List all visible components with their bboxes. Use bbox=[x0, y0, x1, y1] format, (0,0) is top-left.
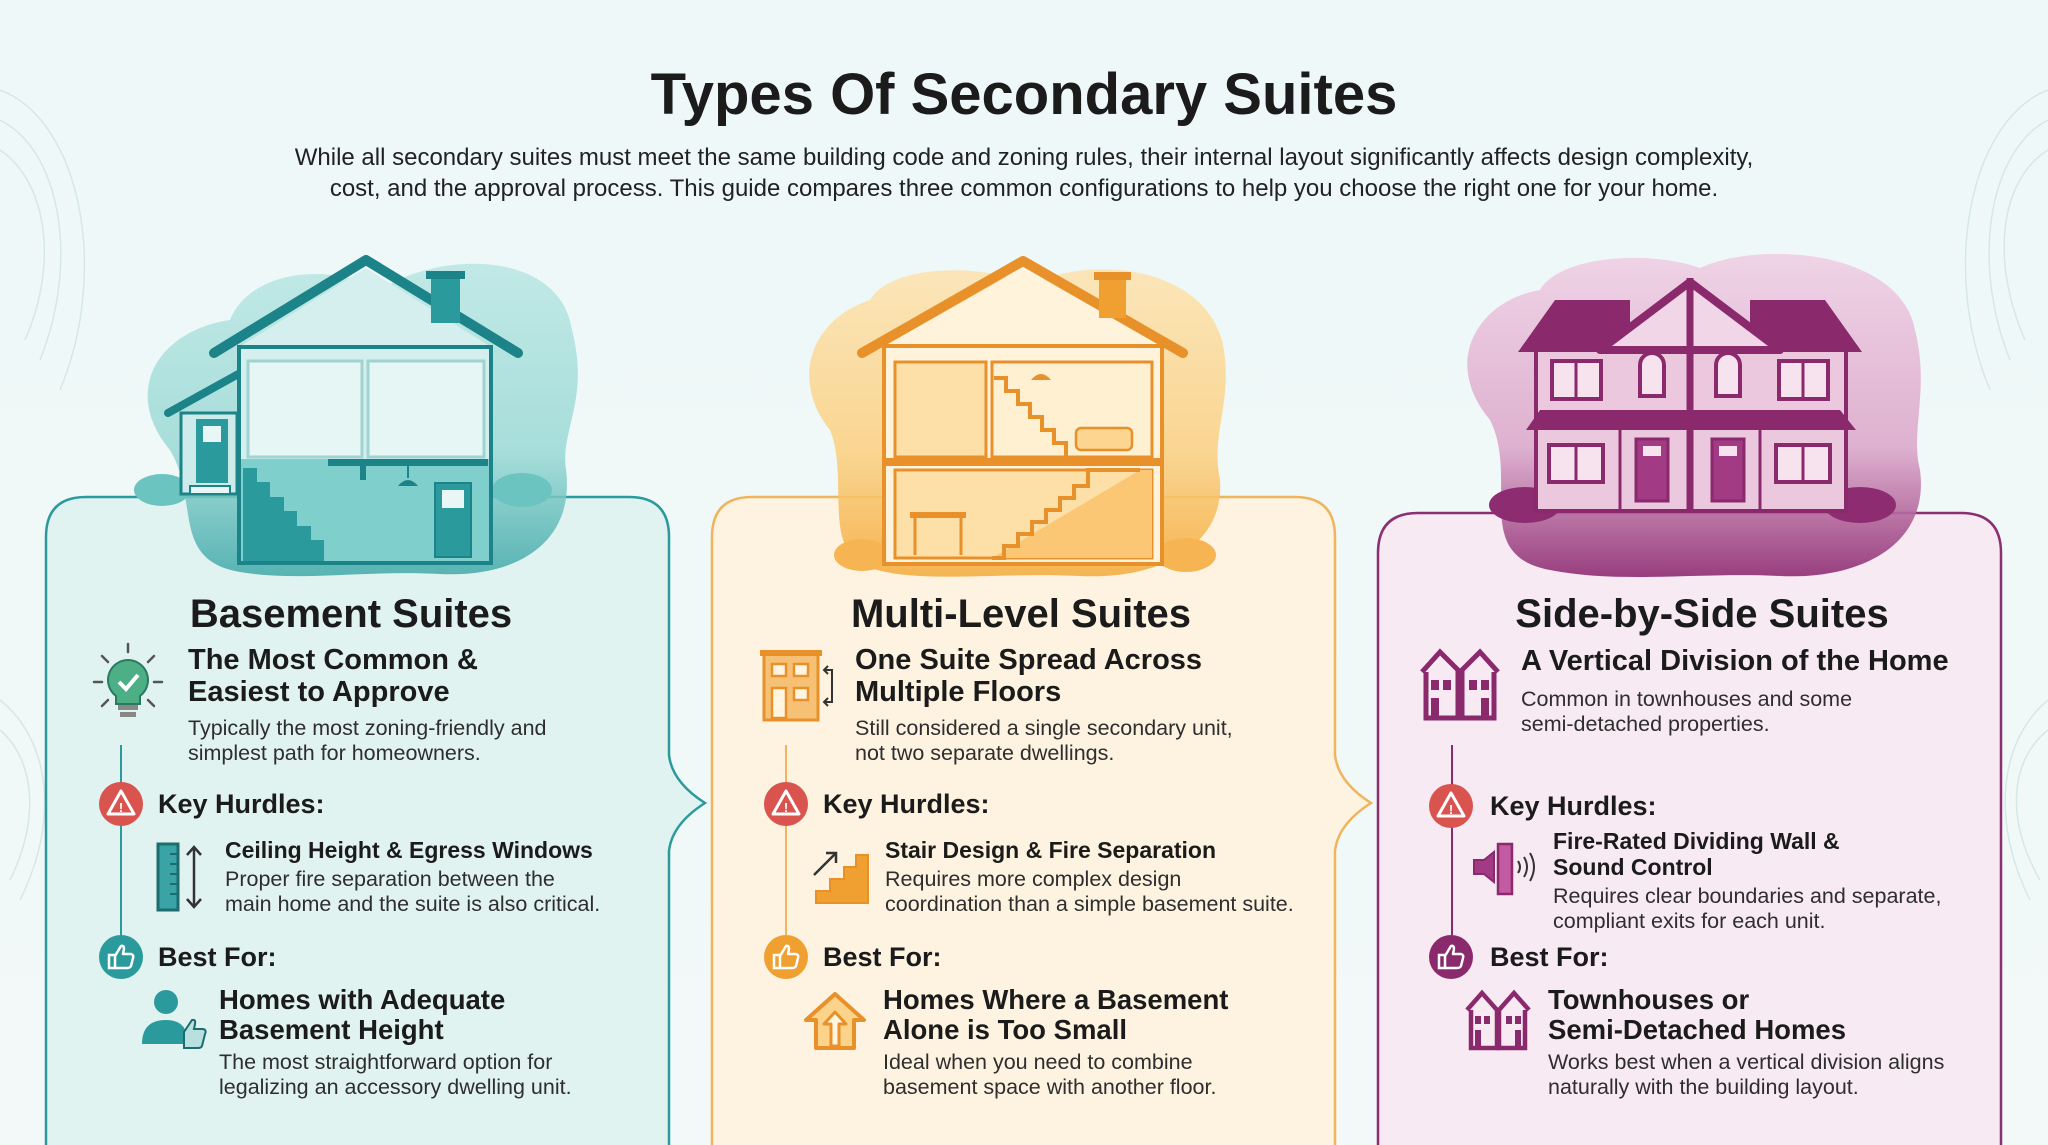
icon: warning: ! bbox=[784, 800, 788, 815]
icon: thumbs up bbox=[99, 935, 143, 979]
best for title: Townhouses or bbox=[1548, 984, 1749, 1015]
timeline line bbox=[785, 745, 787, 935]
description: semi-detached properties. bbox=[1521, 712, 1770, 736]
hurdle description: Requires clear boundaries and separate, bbox=[1553, 884, 1941, 908]
best for description bbox=[219, 1050, 572, 1099]
best for description: The most straightforward option for bbox=[219, 1050, 552, 1074]
subtitle bbox=[294, 144, 1753, 202]
subheading: Easiest to Approve bbox=[188, 676, 450, 708]
illustration: basement house bbox=[134, 260, 578, 576]
best for description: naturally with the building layout. bbox=[1548, 1075, 1859, 1099]
hurdle title bbox=[1553, 828, 1840, 880]
icon: warning: ! bbox=[119, 800, 123, 815]
hurdle description: coordination than a simple basement suite. bbox=[885, 892, 1294, 916]
icon: thumbs up bbox=[1429, 935, 1473, 979]
icon: ruler bbox=[156, 842, 202, 912]
best for title: Semi-Detached Homes bbox=[1548, 1014, 1846, 1045]
hurdle title: Sound Control bbox=[1553, 854, 1713, 880]
heading: side-by-side suites: Side-by-Side Suites bbox=[1515, 592, 1889, 636]
key hurdles label: Key Hurdles: bbox=[1490, 791, 1657, 821]
illustration: side-by-side house bbox=[1467, 254, 1921, 577]
description: Still considered a single secondary unit, bbox=[855, 716, 1233, 740]
icon: warning: ! bbox=[1449, 802, 1453, 817]
panel: side-by-side bbox=[1378, 513, 2001, 1145]
best for title: Homes with Adequate bbox=[219, 984, 505, 1015]
icon: warning bbox=[764, 782, 808, 826]
hurdle description: Proper fire separation between the bbox=[225, 867, 555, 891]
best for label: Best For: bbox=[1490, 942, 1609, 972]
timeline line bbox=[1451, 745, 1453, 935]
best for title: Homes Where a Basement bbox=[883, 984, 1228, 1015]
best for description: Works best when a vertical division aligns bbox=[1548, 1050, 1944, 1074]
hurdle description: Requires more complex design bbox=[885, 867, 1181, 891]
description: simplest path for homeowners. bbox=[188, 741, 481, 765]
description: Typically the most zoning-friendly and bbox=[188, 716, 547, 740]
best for title: Alone is Too Small bbox=[883, 1014, 1127, 1045]
subheading bbox=[855, 644, 1202, 708]
description: Common in townhouses and some bbox=[1521, 687, 1852, 711]
description bbox=[188, 716, 547, 765]
hurdle description bbox=[225, 867, 600, 916]
icon: twin houses bbox=[1420, 648, 1500, 720]
subheading: One Suite Spread Across bbox=[855, 644, 1202, 676]
icon: house with up arrow bbox=[804, 992, 866, 1050]
title: Types Of Secondary Suites bbox=[651, 62, 1397, 127]
best for description bbox=[1548, 1050, 1944, 1099]
icon: townhouses bbox=[1465, 990, 1531, 1050]
best for title: Basement Height bbox=[219, 1014, 444, 1045]
panel: basement bbox=[46, 497, 705, 1145]
description: not two separate dwellings. bbox=[855, 741, 1114, 765]
description bbox=[1521, 687, 1852, 736]
heading: multi-level suites: Multi-Level Suites bbox=[851, 592, 1191, 636]
icon: wall with sound bbox=[1473, 842, 1535, 896]
icon: stairs bbox=[813, 852, 869, 904]
key hurdles label: Key Hurdles: bbox=[823, 789, 990, 819]
timeline line bbox=[120, 745, 122, 935]
panel: multi-level bbox=[712, 497, 1371, 1145]
best for description bbox=[883, 1050, 1216, 1099]
subtitle: While all secondary suites must meet the same building code and zoning rules, their internal layout significantly affects design complexity, bbox=[295, 144, 1753, 171]
subheading: A Vertical Division of the Home bbox=[1521, 645, 1949, 677]
hurdle description bbox=[1553, 884, 1941, 933]
icon: lightbulb check bbox=[92, 642, 164, 717]
best for description: legalizing an accessory dwelling unit. bbox=[219, 1075, 572, 1099]
icon: warning bbox=[1429, 784, 1473, 828]
subheading: Multiple Floors bbox=[855, 676, 1061, 708]
description bbox=[855, 716, 1233, 765]
icon: warning bbox=[99, 782, 143, 826]
best for title bbox=[883, 984, 1228, 1045]
hurdle title: Fire-Rated Dividing Wall & bbox=[1553, 828, 1840, 854]
best for title bbox=[1548, 984, 1846, 1045]
icon: multi-floor building bbox=[760, 650, 833, 722]
subheading: The Most Common & bbox=[188, 644, 478, 676]
icon: person thumbs up bbox=[142, 990, 207, 1049]
hurdle description: main home and the suite is also critical. bbox=[225, 892, 600, 916]
heading: basement suites: Basement Suites bbox=[190, 592, 512, 636]
best for label: Best For: bbox=[158, 942, 277, 972]
best for description: basement space with another floor. bbox=[883, 1075, 1216, 1099]
hurdle title: Ceiling Height & Egress Windows bbox=[225, 837, 593, 863]
hurdle title: Stair Design & Fire Separation bbox=[885, 837, 1216, 863]
icon: thumbs up bbox=[764, 935, 808, 979]
subtitle: cost, and the approval process. This guide compares three common configurations to help you choose the right one for your home. bbox=[330, 175, 1718, 202]
best for label: Best For: bbox=[823, 942, 942, 972]
hurdle description: compliant exits for each unit. bbox=[1553, 909, 1825, 933]
subheading bbox=[188, 644, 478, 708]
hurdle description bbox=[885, 867, 1294, 916]
best for title bbox=[219, 984, 505, 1045]
key hurdles label: Key Hurdles: bbox=[158, 789, 325, 819]
best for description: Ideal when you need to combine bbox=[883, 1050, 1193, 1074]
illustration: multi-level house bbox=[809, 261, 1226, 577]
